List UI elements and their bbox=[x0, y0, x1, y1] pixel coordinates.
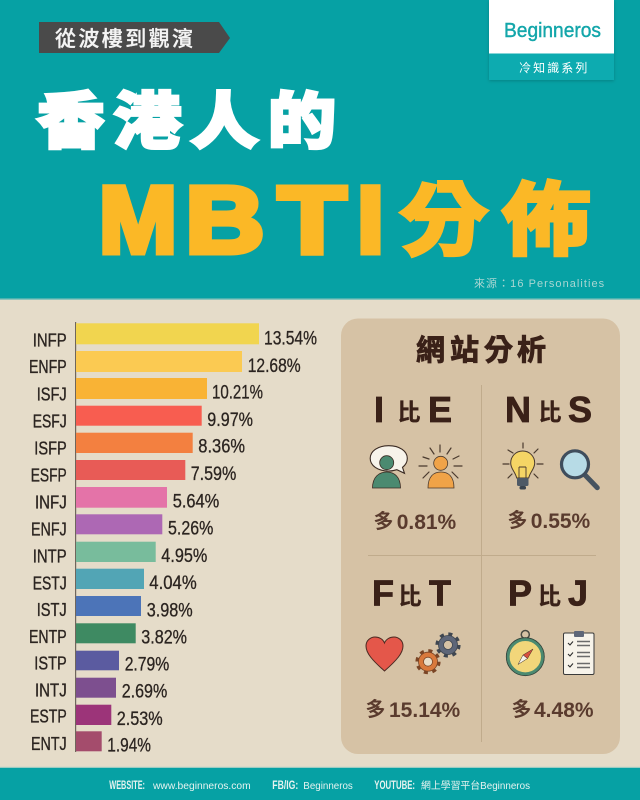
footer: social bbox=[272, 778, 353, 792]
bar: INFJ bbox=[35, 487, 219, 513]
bar: ESFJ bbox=[33, 406, 253, 432]
F vs T heading bbox=[372, 572, 451, 614]
bar: ENTJ: ENTJ bbox=[31, 734, 67, 754]
logo badge: 冷知識系列 bbox=[519, 61, 590, 75]
bar: INFJ: INFJ bbox=[35, 493, 67, 513]
panel heading bbox=[416, 334, 546, 367]
bar: INFJ: 5.64% bbox=[173, 490, 219, 512]
bar: INFP bbox=[33, 323, 317, 351]
panel heading: 站 bbox=[450, 334, 479, 367]
bar: ISTJ: ISTJ bbox=[37, 600, 67, 620]
panel heading: 分 bbox=[484, 335, 513, 367]
icon: magnifying glass bbox=[562, 451, 597, 488]
bar: INFP: INFP bbox=[33, 331, 67, 351]
bar: ENFJ: ENFJ bbox=[31, 519, 67, 539]
bar: ESFJ: 9.97% bbox=[207, 409, 253, 431]
panel heading: 網 bbox=[416, 334, 445, 367]
title: line one: 香 bbox=[37, 88, 105, 156]
icon: talking person bbox=[370, 446, 407, 488]
title: line two bbox=[99, 168, 590, 274]
N vs S value: 0.55% bbox=[531, 510, 591, 533]
bar: ENTJ: 1.94% bbox=[107, 735, 151, 757]
title: line two: M bbox=[99, 168, 177, 274]
source note: 來源：16 Personalities bbox=[474, 276, 605, 290]
N vs S heading: S bbox=[568, 389, 592, 430]
bar: ISTP bbox=[34, 651, 169, 676]
ribbon: subtitle: 從波樓到觀濱 bbox=[55, 28, 195, 51]
footer: website: www.beginneros.com bbox=[152, 781, 251, 792]
footer band bbox=[0, 767, 640, 800]
I vs E heading bbox=[374, 389, 452, 430]
bar: ESTJ: ESTJ bbox=[33, 573, 67, 593]
logo badge: Beginneros bbox=[504, 20, 601, 42]
title: line one: 港 bbox=[114, 88, 182, 156]
P vs J heading: J bbox=[568, 572, 588, 614]
F vs T value: 多 bbox=[366, 693, 386, 722]
bar: ESTP bbox=[30, 705, 163, 730]
bar: ENTP: 3.82% bbox=[141, 627, 187, 649]
bar: ENTP bbox=[29, 623, 187, 649]
F vs T heading: 比 bbox=[398, 577, 422, 611]
I vs E heading: 比 bbox=[398, 393, 420, 427]
bar: ENTP: ENTP bbox=[29, 627, 67, 647]
panel heading: 析 bbox=[517, 334, 546, 367]
title: line two: B bbox=[185, 168, 264, 274]
N vs S heading: 比 bbox=[538, 393, 562, 427]
panel: website analysis bbox=[341, 318, 620, 754]
title: line one: 的 bbox=[268, 88, 336, 156]
bar: INTJ bbox=[35, 678, 167, 703]
bar: INTP bbox=[33, 542, 207, 567]
P vs J value: 4.48% bbox=[534, 699, 594, 722]
footer: social: FB/IG: bbox=[272, 778, 298, 792]
icon: radiant person bbox=[419, 445, 462, 488]
N vs S heading bbox=[505, 389, 592, 430]
N vs S value bbox=[508, 504, 591, 533]
footer: youtube: YOUTUBE: bbox=[374, 778, 415, 792]
bar: ESFJ: ESFJ bbox=[33, 412, 67, 432]
title: line one bbox=[37, 88, 336, 156]
N vs S value: 多 bbox=[508, 504, 528, 533]
bar: ESTP: 2.53% bbox=[117, 708, 163, 730]
bar: ENTJ bbox=[31, 731, 151, 757]
logo badge bbox=[489, 0, 614, 80]
P vs J heading: 比 bbox=[538, 577, 561, 611]
icon: gears bbox=[417, 634, 459, 672]
F vs T heading: F bbox=[372, 572, 394, 614]
bar: ESFP: ESFP bbox=[31, 465, 67, 485]
bar: ENFP: 12.68% bbox=[248, 355, 301, 377]
bar: INTP: INTP bbox=[33, 546, 67, 566]
bar: ESTP: ESTP bbox=[30, 706, 67, 726]
bar: ISFJ bbox=[37, 378, 263, 405]
footer: youtube bbox=[374, 778, 530, 792]
I vs E heading: E bbox=[428, 389, 452, 430]
bar: ENFP bbox=[29, 351, 301, 377]
bar: ESFP: 7.59% bbox=[191, 463, 236, 485]
P vs J heading bbox=[508, 572, 588, 614]
bar: INTJ: 2.69% bbox=[122, 681, 167, 703]
bar: ISTP: ISTP bbox=[34, 654, 67, 674]
icon: checklist clipboard bbox=[564, 631, 594, 674]
bar: INFP: 13.54% bbox=[264, 328, 317, 350]
title: line two: T bbox=[278, 168, 346, 274]
bar: ISTJ bbox=[37, 596, 193, 622]
title: line one: 人 bbox=[190, 88, 258, 156]
footer: website bbox=[109, 778, 251, 792]
bar: INTJ: INTJ bbox=[35, 680, 67, 700]
bar: ESTJ bbox=[33, 569, 197, 594]
title: line two: 佈 bbox=[502, 176, 590, 265]
bar: ISFP bbox=[34, 433, 245, 458]
bar: ENFP: ENFP bbox=[29, 357, 67, 377]
header band bbox=[0, 0, 640, 300]
bar: ISFP: 8.36% bbox=[198, 436, 245, 458]
N vs S heading: N bbox=[505, 389, 531, 430]
P vs J value: 多 bbox=[512, 693, 532, 722]
bar: ISFP: ISFP bbox=[34, 438, 67, 458]
footer: youtube: 網上學習平台Beginneros bbox=[421, 779, 530, 792]
footer: social: Beginneros bbox=[303, 781, 353, 792]
I vs E value: 多 bbox=[374, 505, 394, 534]
I vs E heading: I bbox=[374, 389, 384, 430]
bar: ISTP: 2.79% bbox=[125, 654, 169, 676]
footer: website: WEBSITE: bbox=[109, 778, 145, 792]
P vs J heading: P bbox=[508, 572, 532, 614]
F vs T value bbox=[366, 693, 461, 722]
I vs E value: 0.81% bbox=[397, 511, 457, 534]
icon: light bulb bbox=[503, 443, 543, 490]
bar: ESTJ: 4.04% bbox=[149, 572, 197, 594]
F vs T heading: T bbox=[429, 572, 451, 614]
bar: ISFJ: 10.21% bbox=[212, 382, 263, 404]
icon: compass bbox=[506, 630, 544, 676]
bar chart bbox=[29, 322, 317, 757]
bar: ESFP bbox=[31, 460, 236, 485]
bar: ENFJ bbox=[31, 514, 213, 540]
bar: ISTJ: 3.98% bbox=[147, 600, 193, 622]
title: line two: I bbox=[357, 168, 384, 274]
bar: INTP: 4.95% bbox=[161, 545, 207, 567]
ribbon: subtitle bbox=[39, 22, 230, 53]
title: line two: 分 bbox=[400, 176, 488, 265]
bar: ENFJ: 5.26% bbox=[168, 518, 213, 540]
F vs T value: 15.14% bbox=[389, 699, 461, 722]
I vs E value bbox=[374, 505, 457, 534]
bar: ISFJ: ISFJ bbox=[37, 385, 67, 405]
icon: heart bbox=[366, 637, 403, 671]
P vs J value bbox=[512, 693, 594, 722]
